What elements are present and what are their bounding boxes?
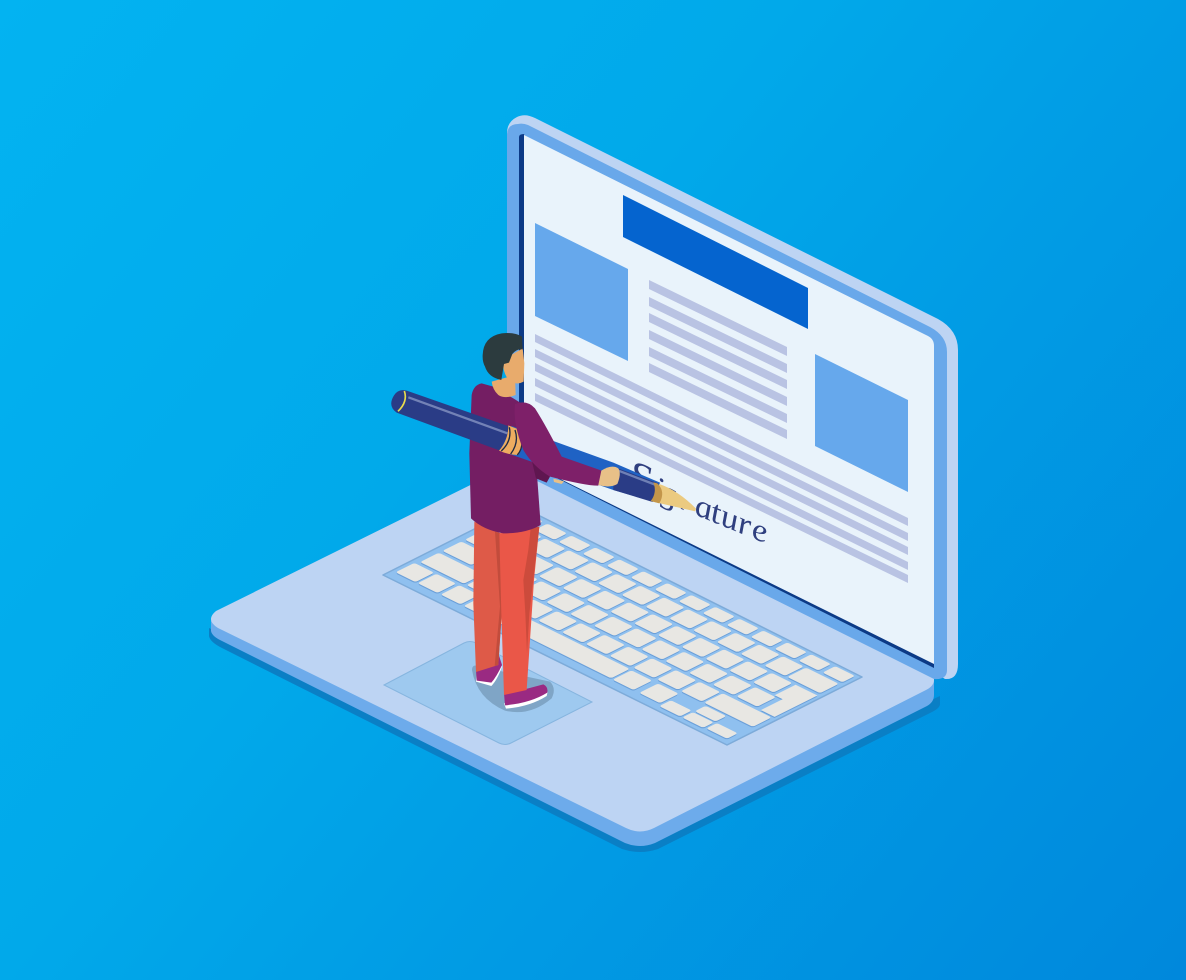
screen bezel: [507, 124, 947, 679]
keyboard keys: [392, 510, 856, 741]
right trouser shade: [523, 527, 539, 653]
pen barrel lower section: [500, 426, 660, 502]
touchpad: [384, 642, 592, 744]
screen face: [524, 135, 934, 664]
neck: [492, 375, 516, 397]
signature text: S: [630, 449, 652, 507]
left shoe: [476, 653, 502, 686]
front hand: [598, 467, 620, 486]
signature text: e: [752, 507, 767, 552]
foot shadow: [472, 666, 554, 712]
document right image: [815, 354, 908, 492]
pen nib: [653, 484, 696, 511]
left trouser shade: [495, 532, 502, 666]
hair: [483, 333, 523, 380]
screen navy edge: [519, 134, 934, 668]
signature text: i: [655, 468, 664, 510]
torso: [469, 383, 541, 533]
pen cap ring: [398, 391, 405, 411]
rear hand on pen: [499, 425, 523, 455]
right shoe: [504, 684, 548, 709]
signature text: u: [721, 495, 738, 540]
laptop: [209, 115, 958, 852]
signature text: a: [695, 484, 712, 529]
document body text lines: [535, 334, 908, 583]
pen barrel highlight: [408, 397, 507, 433]
torso shadow under arm: [532, 460, 550, 483]
document header bar: [623, 195, 808, 329]
laptop base side: [211, 618, 934, 846]
document left image: [535, 223, 628, 361]
document column text lines: [649, 280, 787, 439]
signature text: n: [674, 487, 685, 515]
keyboard well: [383, 506, 862, 745]
laptop base shadow: [209, 628, 940, 852]
signature text: g: [660, 470, 677, 515]
person with pen: [391, 333, 696, 712]
laptop base top: [211, 458, 934, 832]
pen barrel back: [391, 390, 512, 451]
keyboard: [383, 506, 862, 745]
fingers under pen: [553, 479, 564, 484]
pen nib band: [651, 482, 662, 503]
right trouser leg: [499, 527, 539, 695]
face: [503, 348, 524, 383]
pen barrel front: [613, 467, 658, 502]
sleeve: [515, 402, 602, 486]
pen barrel front highlight: [615, 469, 656, 485]
screen back light edge: [507, 115, 958, 679]
signature text: r: [738, 502, 751, 545]
signature text: t: [711, 490, 722, 533]
pen: [391, 390, 696, 511]
left trouser leg: [473, 522, 502, 672]
